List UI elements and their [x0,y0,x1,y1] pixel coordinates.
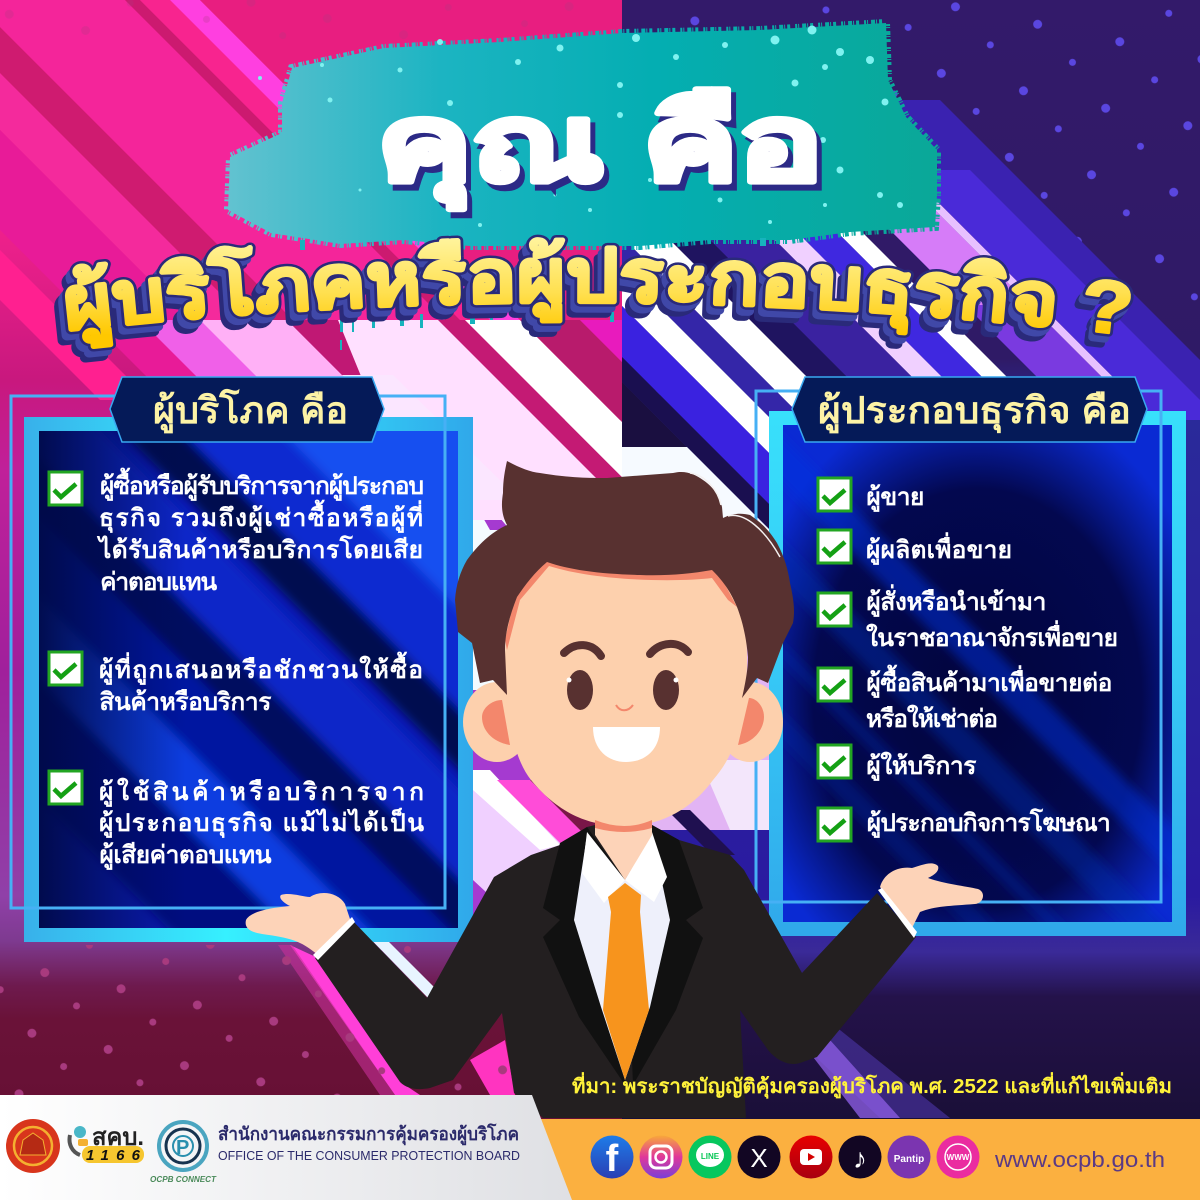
background: right purple half with dots [622,0,1200,1119]
icon: x [738,1136,780,1178]
consumer point 2 [99,651,423,716]
title: คุณ คือ: คุณ คือ [382,91,828,216]
icon: instagram [640,1136,682,1178]
upper pink stripes [0,0,622,400]
panel heading: ผู้บริโภค คือ [110,377,384,442]
hair highlights [690,473,780,557]
icon: line [688,1136,732,1178]
panel: consumer definition [10,376,473,942]
office name [218,1123,520,1163]
logo: hotline 1166 [69,1124,144,1164]
illustration: businessman shrugging [246,461,983,1118]
eyes [566,670,679,710]
icon: line: LINE [701,1152,720,1161]
icon: tiktok: ♪ [853,1143,867,1174]
white glow behind head, right [622,447,770,855]
icon: facebook [590,1136,634,1180]
consumer point 1: ธุรกิจ รวมถึงผู้เช่าซื้อหรือผู้ที่ [99,499,423,534]
smile [593,727,660,762]
consumer point 1: ค่าตอบแทน [100,569,217,596]
icon: green check f [818,808,851,841]
footer bar: orange [540,1119,1200,1200]
hair [455,461,794,698]
operator item: advertiser: ผู้ประกอบกิจการโฆษณา [867,808,1111,838]
title: คุณ คือ [377,85,828,216]
lapels [543,825,703,1085]
face [505,550,747,826]
diagonal stripes under subtitle [622,100,1200,529]
office name: สำนักงานคณะกรรมการคุ้มครองผู้บริโภค [218,1123,519,1146]
icon: pantip [888,1136,930,1178]
title: คุณ คือ: คุณ คือ [377,85,823,210]
shirt cuffs [313,888,917,960]
operator item: reseller [866,664,1112,733]
logo: hotline 1166: สคบ. [92,1124,144,1151]
footer panel: white logos [0,1095,572,1200]
consumer point 1 [96,467,424,596]
consumer point 3: ผู้ใช้สินค้าหรือบริการจาก [99,777,424,807]
consumer point 2: ผู้ที่ถูกเสนอหรือชักชวนให้ซื้อ [99,651,423,685]
pale stripes under subtitle [140,320,622,520]
website address: www.ocpb.go.th [994,1147,1165,1172]
hairline shading [505,558,737,650]
icon: tiktok [838,1136,882,1178]
panel heading: ผู้บริโภค คือ: ผู้บริโภค คือ [153,388,348,434]
left hand [246,893,352,955]
operator item: importer: ในราชอาณาจักรเพื่อขาย [866,620,1118,652]
logo: government seal [6,1119,60,1173]
icon: website [936,1136,980,1178]
white glow beside head [473,420,622,930]
suit: jacket and arms [315,825,916,1118]
source line: ที่มา: พระราชบัญญัติคุ้มครองผู้บริโภค พ.ศ. 2522 และที่แก้ไขเพิ่มเติม [572,1071,1172,1100]
icon: facebook: f [606,1138,619,1180]
consumer point 1: ได้รับสินค้าหรือบริการโดยเสีย [96,535,423,564]
consumer point 3 [99,777,424,870]
icon: pantip: Pantip [894,1154,924,1165]
logo: OCPB Connect: OCPB CONNECT [150,1175,217,1184]
background: left pink half [0,0,622,1120]
icon: green check 2 [49,652,82,685]
icon: green check 1 [49,472,82,505]
eyebrows [564,644,688,656]
panel: business operator definition [754,376,1186,936]
icon: green check c [818,593,851,626]
ear inner shading [482,698,764,745]
neck [595,818,652,880]
operator item: seller: ผู้ขาย [866,484,924,512]
ears [463,682,783,762]
icon: youtube [790,1136,832,1178]
icon: green check b [818,530,851,563]
operator item: importer [866,584,1118,652]
stripes beside left arm [278,925,515,1095]
logo: OCPB Connect [150,1122,217,1184]
icon: x: X [750,1143,768,1173]
icon: green check a [818,478,851,511]
panel heading: ผู้ประกอบธุรกิจ คือ [792,377,1147,442]
shirt collar [582,832,667,903]
panel heading: ผู้ประกอบธุรกิจ คือ: ผู้ประกอบธุรกิจ คือ [818,390,1131,434]
icon: website: WWW [947,1153,970,1162]
subtitle: ผู้บริโภคหรือผู้ประกอบธุรกิจ ?: ผู้บริโภคหรือผู้ประกอบธุรกิจ ? [58,243,1128,358]
consumer point 1: ผู้ซื้อหรือผู้รับบริการจากผู้ประกอบ [100,467,424,501]
operator item: reseller: หรือให้เช่าต่อ [866,704,998,733]
icon: green check 3 [49,771,82,804]
icon: green check e [818,745,851,778]
logo: hotline 1166: 1166 [86,1147,141,1164]
shirt [574,835,670,1080]
tie [603,883,649,1080]
subtitle: ผู้บริโภคหรือผู้ประกอบธุรกิจ ?: ผู้บริโภคหรือผู้ประกอบธุรกิจ ? [62,234,1134,352]
teal brush stroke behind title [228,23,937,350]
operator item: reseller: ผู้ซื้อสินค้ามาเพื่อขายต่อ [866,664,1112,698]
right hand [880,863,983,928]
consumer point 2: สินค้าหรือบริการ [99,688,272,716]
consumer point 3: ผู้เสียค่าตอบแทน [99,841,272,870]
logo: OCPB Connect: P [176,1137,189,1159]
consumer point 3: ผู้ประกอบธุรกิจ แม้ไม่ได้เป็น [99,807,424,839]
subtitle: ผู้บริโภคหรือผู้ประกอบธุรกิจ ?: ผู้บริโภคหรือผู้ประกอบธุรกิจ ? [54,248,1124,362]
subtitle: ผู้บริโภคหรือผู้ประกอบธุรกิจ ?: ผู้บริโภคหรือผู้ประกอบธุรกิจ ? [64,237,1131,349]
social icons row [590,1136,980,1180]
operator item: importer: ผู้สั่งหรือนำเข้ามา [866,584,1046,617]
office name: OFFICE OF THE CONSUMER PROTECTION BOARD [218,1148,520,1163]
icon: green check d [818,668,851,701]
nose [616,705,633,710]
operator item: service provider: ผู้ให้บริการ [866,751,977,781]
operator item: producer: ผู้ผลิตเพื่อขาย [866,532,1012,565]
